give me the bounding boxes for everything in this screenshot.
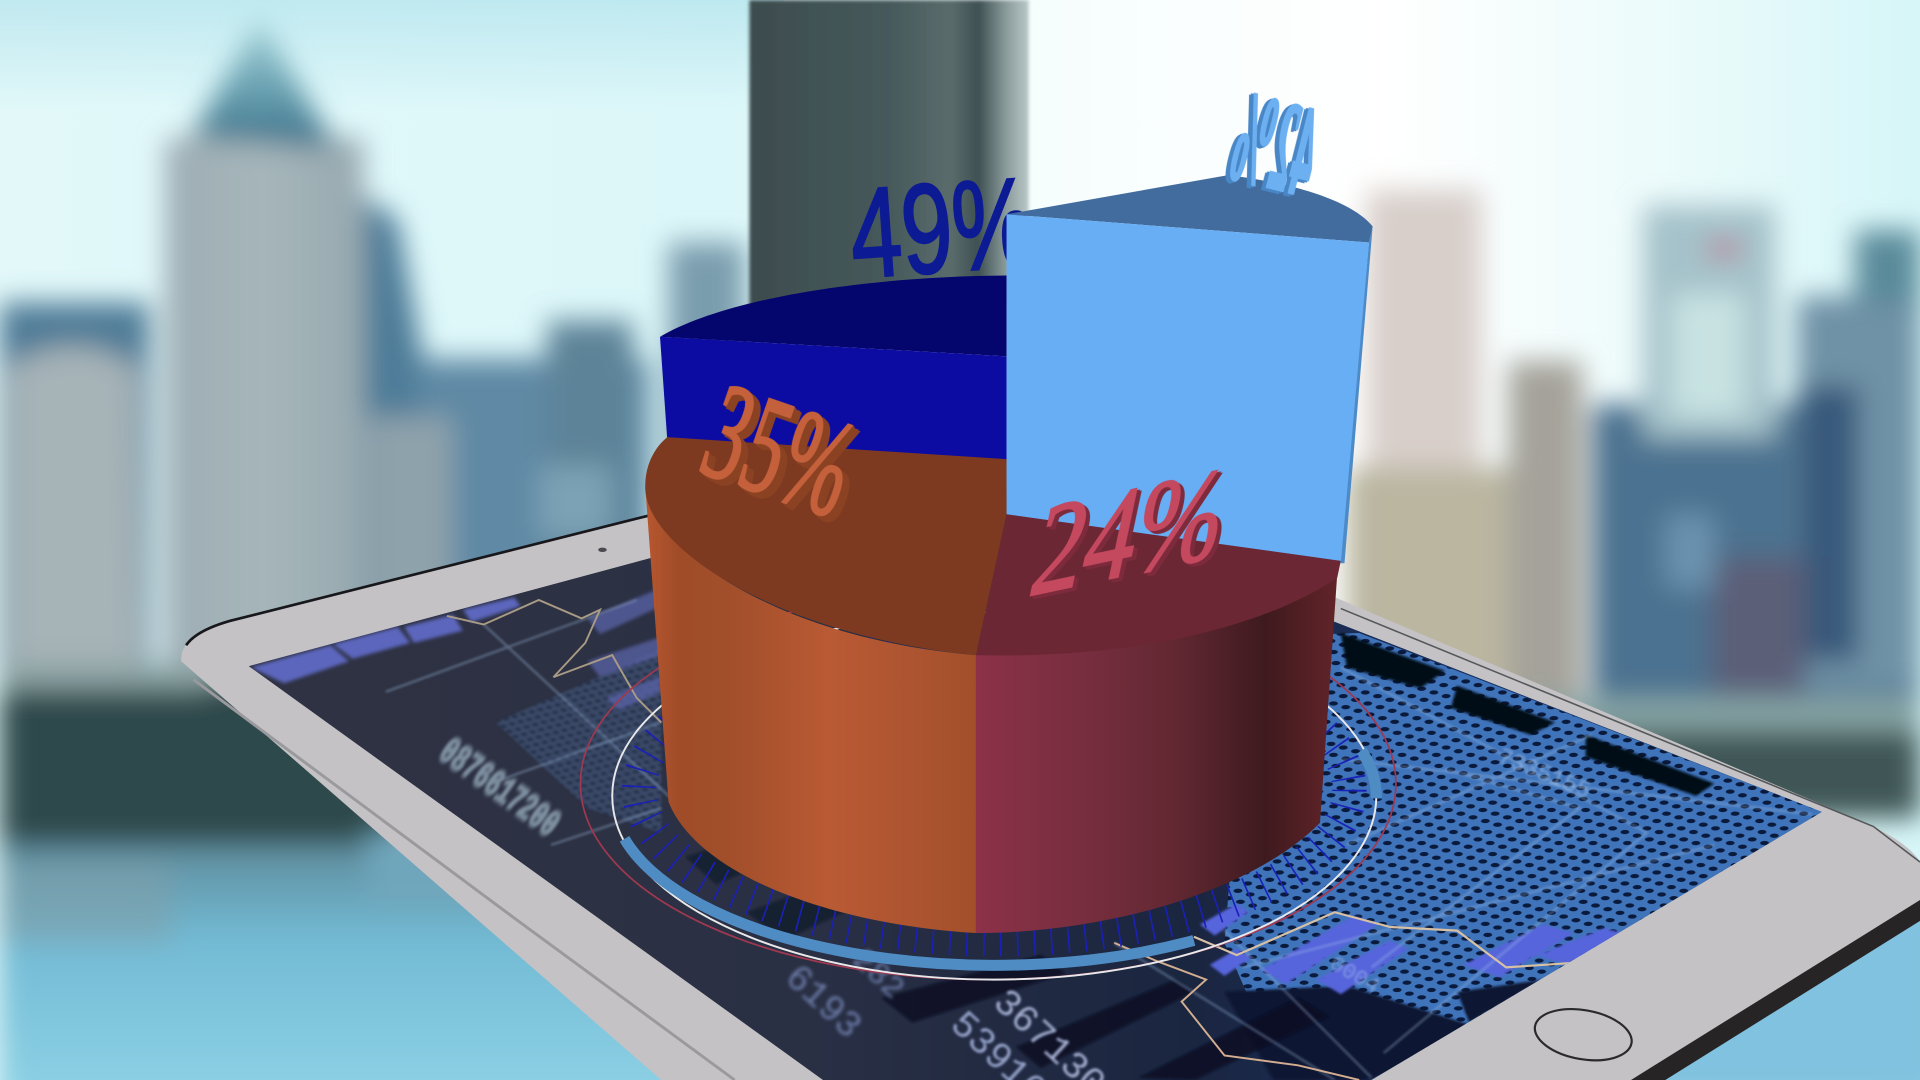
pie slice: crimson 24% [976,514,1341,933]
tablet bezel [181,437,1920,1080]
screen numbers: 282 [844,942,911,1008]
light blue top face [1007,175,1373,242]
candlestick bars lower right [1200,904,1622,994]
crimson side [976,576,1337,933]
screen numbers: 0876617200 [430,730,568,847]
beige price line bottom [1114,943,1359,1080]
screen numbers: 0004 [1325,952,1383,1000]
beige price line left [447,600,661,722]
light blue right edge [1341,227,1373,563]
screen numbers [430,730,1594,1080]
dim dot grid left [496,649,661,833]
bright dot grid right [1224,633,1822,1080]
grid lines [386,600,1812,1080]
crimson top face [976,514,1341,655]
tick marks [639,640,1349,939]
central dark tower [749,0,1029,306]
24% label: 24% [1020,438,1239,626]
pie slice: orange 35% [645,437,1007,933]
42% label seen edge-on: 42% [1218,63,1333,223]
blue arc [624,839,1194,965]
beige price line right [1194,912,1598,967]
camera dot [598,548,607,552]
dark blue front face [660,337,1007,463]
tablet side groove line [193,680,735,1080]
light blue front face [1007,214,1369,563]
pie slice: dark blue 49% [660,276,1007,463]
tablet dark lower-right edge [1614,879,1920,1080]
tablet device [181,437,1920,1080]
hologram rings under the pie [580,588,1396,980]
49% label: 49% [845,151,1038,305]
blue arc stub [1362,751,1376,798]
orange side [645,487,976,933]
periwinkle candlestick bars upper-left [588,588,661,710]
dark candles under the chart [686,850,1327,1080]
tablet screen: financial data [249,475,1822,1080]
pie slice: light blue [1007,175,1373,563]
screen numbers: 6193 [775,958,869,1048]
home button [1531,1002,1636,1067]
periwinkle blocks at top-left [251,598,520,683]
black patches along the top-right [1224,633,1714,1080]
white ring [612,612,1376,980]
tablet top-left rim [186,516,649,645]
red ring [580,588,1396,980]
dark blue top face [660,276,1007,356]
orange top face [645,437,1007,655]
screen numbers: 7335155 [1494,744,1594,805]
tablet top-right rim [1341,609,1920,862]
35% label: 35% [686,353,874,547]
